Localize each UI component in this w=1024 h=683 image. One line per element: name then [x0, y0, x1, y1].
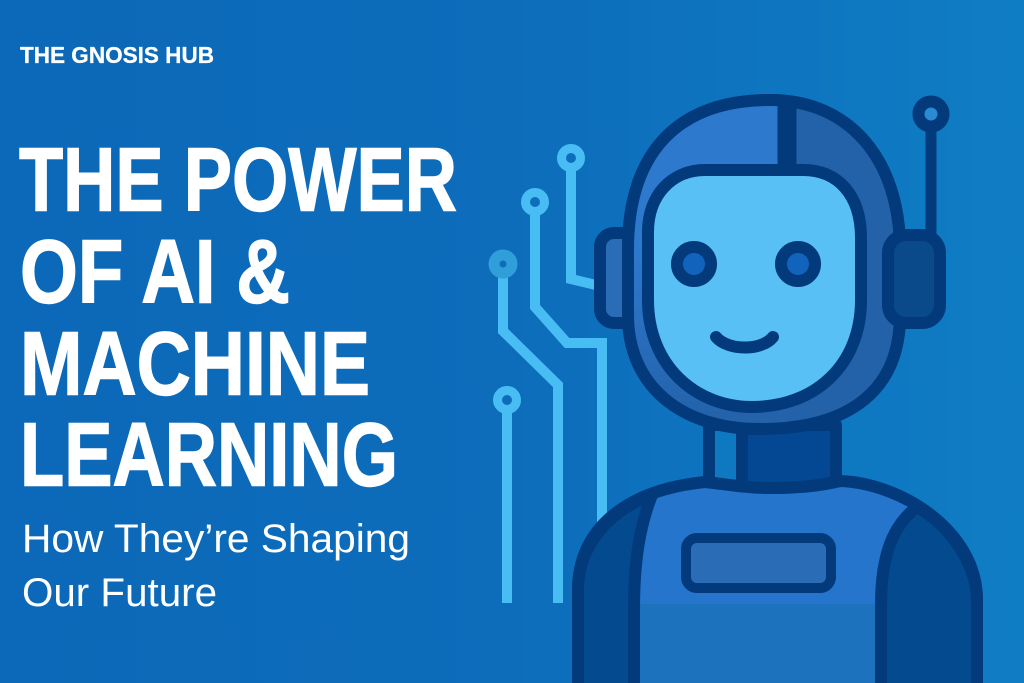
left arm: [578, 495, 652, 683]
title: LEARNING: [20, 406, 398, 506]
trace 2: [535, 214, 602, 530]
antenna: [918, 102, 944, 240]
subtitle: How They’re Shaping: [22, 517, 410, 561]
title: MACHINE: [20, 314, 370, 414]
circuit traces: [494, 148, 602, 603]
right eye: [781, 247, 815, 281]
title: [19, 130, 457, 506]
node 1: [562, 148, 580, 168]
node 4: [498, 390, 516, 410]
left eye: [677, 247, 711, 281]
right arm: [881, 507, 977, 683]
helmet: [628, 100, 900, 429]
subtitle: [22, 517, 410, 615]
title: OF AI &: [20, 222, 290, 322]
smile: [716, 337, 773, 348]
right ear: [888, 235, 940, 323]
title: THE POWER: [19, 130, 457, 230]
trace 4: [502, 410, 512, 603]
face: [648, 170, 861, 407]
trace 1: [571, 170, 596, 285]
node 2: [526, 192, 544, 212]
robot: [578, 100, 977, 683]
chest panel: [686, 538, 831, 588]
left ear: [600, 233, 640, 323]
trace 3: [503, 276, 558, 603]
body: [578, 481, 977, 683]
node 3: [494, 255, 512, 273]
brand label: THE GNOSIS HUB: [20, 42, 214, 68]
helmet seam: [778, 100, 796, 170]
neck: [709, 425, 836, 495]
subtitle: Our Future: [22, 571, 217, 615]
